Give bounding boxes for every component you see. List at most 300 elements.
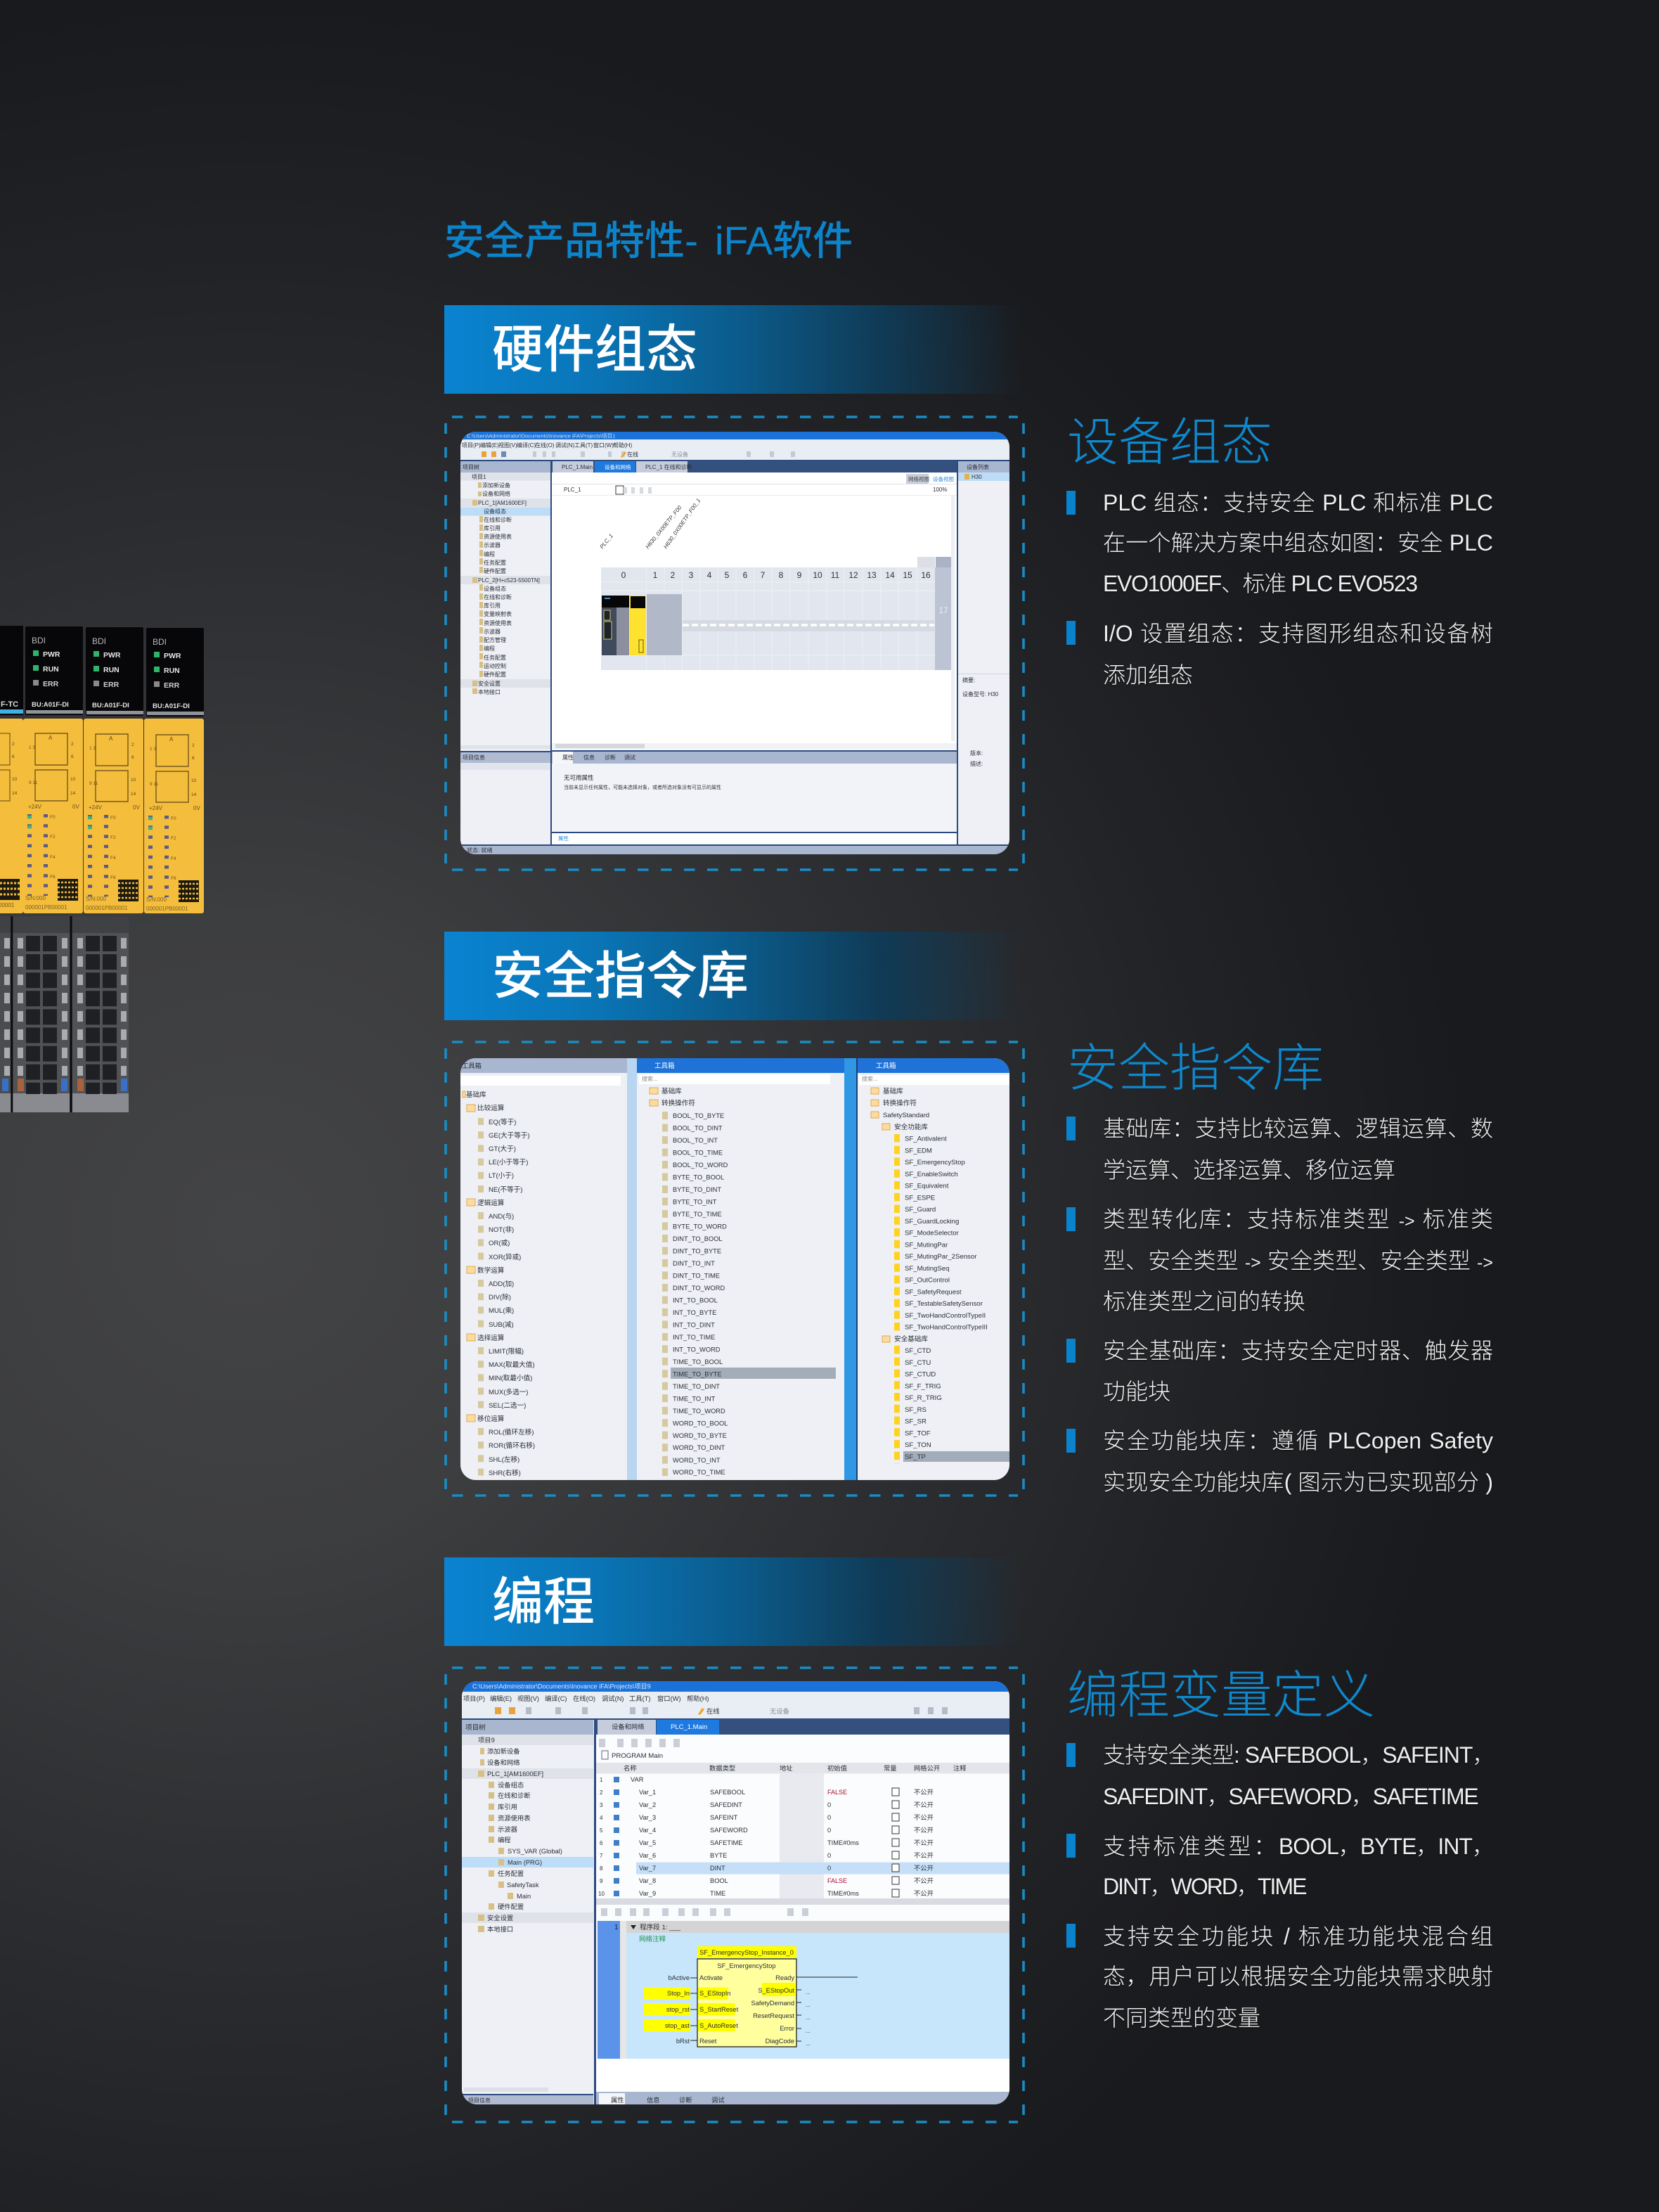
project tree panel: 编程 bbox=[484, 645, 495, 652]
variable table: PROGRAM Main bbox=[612, 1752, 663, 1760]
module 4: RUN bbox=[164, 667, 180, 675]
toolbox: conversion operators: INT_TO_WORD bbox=[673, 1346, 721, 1353]
menu and toolbar: 视图(V) bbox=[517, 1695, 539, 1702]
project tree panel: 添加新设备 bbox=[482, 482, 510, 489]
module 2: ERR bbox=[43, 680, 59, 688]
toolbox: SafetyStandard: SF_TestableSafetySensor bbox=[905, 1300, 983, 1308]
project tree panel: PLC_1[AM1600EF] bbox=[487, 1770, 543, 1777]
toolbox: conversion operators: 搜索... bbox=[642, 1075, 658, 1082]
variable table: BOOL bbox=[710, 1877, 728, 1884]
bullet list: instruction library: 型、安全类型 -⁠> 安全类型、安全类型 -⁠> bbox=[1103, 1248, 1493, 1273]
bullet list: instruction library: 基础库：支持比较运算、逻辑运算、数 bbox=[1103, 1116, 1493, 1141]
device view canvas: 11 bbox=[831, 570, 840, 580]
variable table: 数据类型 bbox=[709, 1764, 735, 1772]
project tree panel: 资源使用表 bbox=[498, 1814, 530, 1822]
module 4: ERR bbox=[164, 681, 180, 690]
function block SF_EmergencyStop: Stop_In bbox=[667, 1990, 690, 1997]
toolbox: SafetyStandard: SF_EmergencyStop bbox=[905, 1159, 965, 1166]
project tree panel: 变量映射表 bbox=[484, 610, 512, 617]
project tree panel: 硬件配置 bbox=[484, 671, 506, 678]
status bar: 状态: 就绪 bbox=[467, 847, 492, 854]
project tree panel: 任务配置 bbox=[484, 654, 506, 661]
toolbox: conversion operators: BOOL_TO_INT bbox=[673, 1137, 718, 1144]
device view canvas: 4 bbox=[707, 570, 712, 580]
heading: 编程变量定义: 编程变量定义 bbox=[1067, 1667, 1375, 1724]
toolbox: conversion operators: BOOL_TO_BYTE bbox=[673, 1112, 724, 1119]
project tree panel: 本地接口 bbox=[478, 688, 501, 695]
ladder network with function block: 程序段 1: ___ bbox=[640, 1923, 681, 1931]
toolbox: base library: EQ(等于) bbox=[489, 1118, 516, 1126]
section banner: 编程: 编程 bbox=[492, 1574, 595, 1631]
module 2: 2 bbox=[71, 742, 74, 747]
project tree panel: 运动控制 bbox=[484, 662, 506, 669]
bullet list: instruction library bbox=[1066, 1116, 1493, 1495]
toolbox: conversion operators: BYTE_TO_INT bbox=[673, 1198, 717, 1205]
variable table: 0 bbox=[827, 1827, 831, 1834]
toolbox: base library: AND(与) bbox=[489, 1213, 514, 1221]
toolbox: conversion operators: BYTE_TO_TIME bbox=[673, 1211, 722, 1218]
variable table: 不公开 bbox=[914, 1789, 934, 1796]
toolbox: SafetyStandard: SF_MutingPar bbox=[905, 1241, 948, 1249]
toolbox: SafetyStandard: SF_TwoHandControlTypeII bbox=[905, 1312, 986, 1320]
device library panel bbox=[958, 461, 1009, 767]
function block SF_EmergencyStop: S_EStopOut bbox=[758, 1987, 794, 1994]
module 3: ERR bbox=[103, 681, 120, 689]
project tree panel: 库引用 bbox=[484, 525, 501, 532]
toolbox: conversion operators: TIME_TO_DINT bbox=[673, 1383, 720, 1390]
toolbox: SafetyStandard: SF_CTUD bbox=[905, 1371, 936, 1379]
toolbox: base library: SEL(二选一) bbox=[489, 1401, 526, 1410]
function block SF_EmergencyStop: S_StartReset bbox=[699, 2006, 739, 2013]
toolbox: SafetyStandard: SF_ModeSelector bbox=[905, 1229, 960, 1237]
title: 安全产品特性- iFA软件 bbox=[444, 219, 853, 264]
toolbox: base library: OR(或) bbox=[489, 1239, 510, 1247]
function block SF_EmergencyStop: ... bbox=[806, 2014, 811, 2021]
toolbox: conversion operators: INT_TO_BOOL bbox=[673, 1297, 718, 1304]
function block SF_EmergencyStop: S_EStopIn bbox=[699, 1990, 730, 1997]
module partial left: 10 bbox=[12, 777, 18, 782]
module 2: BDI bbox=[32, 636, 46, 645]
toolbox: conversion operators: INT_TO_BYTE bbox=[673, 1309, 716, 1316]
properties panel: 属性 bbox=[558, 835, 569, 842]
bullet list: instruction library: 安全功能块库：遵循 PLCopen Safety bbox=[1103, 1428, 1493, 1453]
toolbox: SafetyStandard: SF_MutingSeq bbox=[905, 1265, 949, 1273]
toolbox: base library: NE(不等于) bbox=[489, 1185, 523, 1194]
toolbox: base library: SUB(减) bbox=[489, 1320, 514, 1329]
variable table: 不公开 bbox=[914, 1877, 934, 1884]
toolbox: conversion operators: BYTE_TO_WORD bbox=[673, 1223, 727, 1230]
module 4: 10 bbox=[191, 778, 197, 783]
toolbox: SafetyStandard: SF_ESPE bbox=[905, 1194, 935, 1202]
module 4: F4 bbox=[171, 856, 176, 861]
module 2: S/N:000 bbox=[25, 895, 46, 901]
module 4 bbox=[144, 628, 204, 913]
project tree panel: PLC_1[AM1600EF] bbox=[478, 500, 527, 506]
toolbox: base library: GE(大于等于) bbox=[489, 1131, 530, 1140]
variable table: 4 bbox=[600, 1815, 603, 1821]
module 4: 000001PB00001 bbox=[146, 906, 188, 912]
toolbox: SafetyStandard: SF_Guard bbox=[905, 1206, 936, 1214]
toolbox: conversion operators: DINT_TO_TIME bbox=[673, 1272, 720, 1279]
bullet list: device configuration bbox=[1066, 490, 1493, 688]
menu and toolbar: 帮助(H) bbox=[613, 442, 632, 449]
module 2: +24V bbox=[28, 804, 42, 810]
properties panel: 诊断 bbox=[605, 754, 616, 761]
device library panel: 设备列表 bbox=[967, 463, 989, 470]
menu and toolbar: 无设备 bbox=[671, 451, 688, 458]
toolbox: conversion operators: TIME_TO_BYTE bbox=[673, 1370, 722, 1377]
toolbox: base library bbox=[460, 1058, 627, 1480]
section banner: 编程 bbox=[444, 1557, 1021, 1646]
device view canvas: PLC_1 bbox=[599, 533, 614, 550]
project tree panel: SYS_VAR (Global) bbox=[508, 1848, 562, 1855]
toolbox: base library: MUX(多选一) bbox=[489, 1388, 529, 1396]
module 2: 14 bbox=[70, 791, 76, 796]
toolbox: SafetyStandard: 安全功能库 bbox=[894, 1123, 928, 1131]
variable table: 不公开 bbox=[914, 1814, 934, 1821]
ladder network with function block: 1 bbox=[614, 1924, 619, 1931]
toolbox: SafetyStandard: SF_Antivalent bbox=[905, 1135, 947, 1143]
toolbox: SafetyStandard: 搜索... bbox=[862, 1075, 878, 1082]
menu and toolbar: 工具(T) bbox=[629, 1695, 650, 1702]
module 2: 000001PB00001 bbox=[25, 904, 67, 911]
properties panel: 调试 bbox=[624, 754, 635, 761]
toolbox: conversion operators: DINT_TO_BYTE bbox=[673, 1247, 721, 1254]
function block SF_EmergencyStop: DiagCode bbox=[766, 2038, 794, 2045]
toolbox: conversion operators: WORD_TO_BYTE bbox=[673, 1432, 727, 1439]
toolbox: base library: MUL(乘) bbox=[489, 1306, 514, 1315]
project tree panel: 设备组态 bbox=[484, 508, 506, 515]
device view canvas: H630_0X00ETP_F00_1 bbox=[662, 497, 702, 550]
toolbox: SafetyStandard: SF_RS bbox=[905, 1406, 927, 1414]
toolbox: base library: SHL(左移) bbox=[489, 1455, 519, 1464]
bullet list: programming: 态，用户可以根据安全功能块需求映射 bbox=[1103, 1964, 1493, 1989]
function block SF_EmergencyStop: Reset bbox=[699, 2038, 717, 2045]
toolbox: SafetyStandard: SF_EDM bbox=[905, 1147, 932, 1155]
variable table: Var_7 bbox=[639, 1865, 656, 1872]
function block SF_EmergencyStop: SF_EmergencyStop bbox=[717, 1962, 776, 1969]
module 4: F6 bbox=[171, 876, 176, 881]
variable table: 0 bbox=[827, 1865, 831, 1872]
variable table: 不公开 bbox=[914, 1801, 934, 1808]
device view canvas: 网络视图 bbox=[908, 475, 929, 482]
device view canvas: 0 bbox=[621, 570, 626, 580]
menu and toolbar: 在线(O) bbox=[573, 1695, 595, 1702]
toolbox: SafetyStandard: SF_CTD bbox=[905, 1347, 931, 1355]
project tree panel: 示波器 bbox=[484, 541, 501, 548]
variable table: 0 bbox=[827, 1801, 831, 1808]
menu and toolbar: 工具(T) bbox=[574, 442, 593, 449]
project tree panel: 库引用 bbox=[498, 1803, 517, 1811]
project tree panel: Main bbox=[517, 1893, 531, 1900]
toolbox: base library: MAX(取最大值) bbox=[489, 1361, 535, 1369]
device view canvas: 5 bbox=[725, 570, 730, 580]
menu and toolbar: 项目(P) bbox=[463, 1695, 485, 1702]
module 2 bbox=[23, 626, 83, 913]
toolbox: SafetyStandard: SF_SafetyRequest bbox=[905, 1288, 962, 1296]
toolbox: SafetyStandard: SF_GuardLocking bbox=[905, 1218, 959, 1226]
toolbox: conversion operators: WORD_TO_TIME bbox=[673, 1469, 725, 1476]
module 2: 0V bbox=[72, 804, 79, 810]
device library panel: 版本: bbox=[970, 750, 983, 757]
module 2: BU:A01F-DI bbox=[32, 701, 69, 709]
device view canvas: 2 bbox=[671, 570, 676, 580]
function block SF_EmergencyStop: Activate bbox=[699, 1974, 723, 1981]
project tree panel: 项目树 bbox=[463, 463, 479, 470]
device view canvas: 13 bbox=[867, 570, 877, 580]
menu and toolbar: 调试(N) bbox=[602, 1695, 624, 1702]
module 4: PWR bbox=[164, 652, 181, 660]
device view canvas: 9 bbox=[797, 570, 802, 580]
navy dividers and tab strip: PLC_1 在线和诊断 bbox=[645, 463, 692, 470]
module 4: 2 bbox=[192, 743, 195, 748]
menu and toolbar: 窗口(W) bbox=[657, 1695, 681, 1702]
toolbox: base library: ROL(循环左移) bbox=[489, 1428, 534, 1436]
module 3: BU:A01F-DI bbox=[92, 702, 129, 709]
toolbox: SafetyStandard: 转换操作符 bbox=[883, 1099, 917, 1107]
variable table: Var_5 bbox=[639, 1839, 656, 1846]
menu and toolbar: 窗口(W) bbox=[593, 442, 614, 449]
toolbox: conversion operators: WORD_TO_INT bbox=[673, 1457, 721, 1464]
device view canvas: 14 bbox=[885, 570, 895, 580]
device view canvas: 6 bbox=[743, 570, 748, 580]
variable table: 不公开 bbox=[914, 1865, 934, 1872]
device view canvas: 15 bbox=[903, 570, 912, 580]
menu and toolbar: 编辑(E) bbox=[480, 442, 499, 449]
variable table: Var_9 bbox=[639, 1890, 656, 1897]
toolbox: conversion operators: 工具箱 bbox=[654, 1062, 675, 1070]
bullet list: instruction library: 标准类型之间的转换 bbox=[1103, 1289, 1305, 1314]
variable table: TIME bbox=[710, 1890, 725, 1897]
module 4: 6 bbox=[192, 756, 195, 761]
variable table: 0 bbox=[827, 1852, 831, 1859]
menu and toolbar: 在线 bbox=[627, 451, 638, 458]
properties panel: 信息 bbox=[583, 754, 595, 761]
project tree panel bbox=[462, 1720, 593, 2104]
project tree panel: PLC_2[H+c523-5500TN] bbox=[478, 577, 540, 584]
module partial left: 2 bbox=[12, 742, 15, 747]
function block SF_EmergencyStop: stop_ast bbox=[665, 2022, 690, 2029]
toolbox: conversion operators: DINT_TO_BOOL bbox=[673, 1235, 723, 1242]
toolbox: conversion operators: BOOL_TO_WORD bbox=[673, 1162, 728, 1169]
window title bar: C:\Users\Administrator\Documents\Inovance iFA\Projects\项目9 bbox=[472, 1683, 651, 1690]
project tree panel: 硬件配置 bbox=[484, 567, 506, 574]
project tree panel: 安全设置 bbox=[478, 680, 501, 687]
module partial left: F-TC bbox=[1, 700, 18, 709]
project tree panel: 设备组态 bbox=[498, 1781, 524, 1789]
variable table: Var_1 bbox=[639, 1789, 656, 1796]
module 3 bbox=[84, 627, 143, 913]
toolbox: base library: 基础库 bbox=[466, 1091, 486, 1099]
menu and toolbar: 调试(N) bbox=[555, 442, 574, 449]
module 4: BU:A01F-DI bbox=[153, 702, 190, 710]
module 3: 14 bbox=[131, 792, 136, 797]
menu and toolbar bbox=[462, 1692, 1009, 1718]
module 3: F0 bbox=[110, 816, 116, 821]
toolbox: base library: 工具箱 bbox=[462, 1062, 482, 1069]
device library panel: 描述: bbox=[970, 760, 983, 767]
variable table: 10 bbox=[598, 1891, 605, 1897]
section banner: 硬件组态: 硬件组态 bbox=[492, 321, 697, 378]
toolbox: base library: 选择运算 bbox=[477, 1334, 505, 1342]
screenshot: programming environment bbox=[462, 1681, 1009, 2104]
module 4: +24V bbox=[149, 805, 163, 811]
menu and toolbar: 无设备 bbox=[770, 1707, 790, 1715]
menu and toolbar: 项目(P) bbox=[462, 442, 481, 449]
module 3: RUN bbox=[103, 666, 120, 674]
toolbox: SafetyStandard: SF_CTU bbox=[905, 1359, 931, 1367]
toolbox: conversion operators: TIME_TO_WORD bbox=[673, 1408, 725, 1415]
bullet list: instruction library: 实现安全功能块库( 图示为已实现部分 ) bbox=[1103, 1470, 1493, 1495]
device view canvas: 3 bbox=[689, 570, 694, 580]
module 4: 9 11 bbox=[150, 782, 159, 787]
toolbox: base library: LIMIT(限幅) bbox=[489, 1347, 524, 1356]
menu and toolbar: 编辑(E) bbox=[490, 1695, 512, 1702]
toolbox: base library: GT(大于) bbox=[489, 1145, 516, 1153]
project tree panel: 任务配置 bbox=[498, 1870, 524, 1877]
variable table: 注释 bbox=[953, 1764, 967, 1772]
menu and toolbar: 在线(O) bbox=[535, 442, 555, 449]
variable table: 不公开 bbox=[914, 1839, 934, 1846]
toolbox: SafetyStandard: 安全基础库 bbox=[894, 1335, 928, 1343]
variable table: 网格公开 bbox=[914, 1764, 940, 1772]
variable table: DINT bbox=[710, 1865, 725, 1872]
device library panel: H30 bbox=[971, 474, 982, 480]
device library panel: 设备型号: H30 bbox=[962, 690, 999, 697]
bullet list: device configuration: 添加组态 bbox=[1103, 662, 1193, 688]
project tree panel: 项目1 bbox=[472, 474, 486, 480]
module 4: F0 bbox=[171, 816, 176, 821]
navy dividers and tab strip bbox=[460, 460, 1009, 472]
bottom tabs: 调试 bbox=[711, 2096, 725, 2104]
bullet list: programming: 支持标准类型：BOOL，BYTE，INT， bbox=[1103, 1834, 1494, 1859]
ladder network with function block: 网络注释 bbox=[639, 1935, 666, 1943]
properties panel: 无可用属性 bbox=[564, 774, 594, 781]
toolbox: conversion operators: WORD_TO_DINT bbox=[673, 1444, 725, 1451]
project tree panel: 项目信息 bbox=[463, 754, 485, 761]
toolbox: SafetyStandard: SF_Equivalent bbox=[905, 1183, 949, 1190]
function block SF_EmergencyStop bbox=[644, 1946, 858, 2047]
device view canvas: H630_0X00ETP_F00 bbox=[645, 504, 683, 550]
toolbox: SafetyStandard: SF_SR bbox=[905, 1418, 927, 1426]
toolbox: base library: DIV(除) bbox=[489, 1293, 511, 1301]
variable table: SAFEINT bbox=[710, 1814, 738, 1821]
variable table: Var_6 bbox=[639, 1852, 656, 1859]
bottom tabs: 信息 bbox=[647, 2096, 660, 2104]
toolbox: SafetyStandard: SF_TwoHandControlTypeIII bbox=[905, 1323, 988, 1332]
function block SF_EmergencyStop: ... bbox=[806, 1989, 811, 1995]
device view canvas: 1 bbox=[653, 570, 658, 580]
navy dividers and tab strip: PLC_1.Main bbox=[562, 464, 593, 470]
project tree panel: 在线和诊断 bbox=[498, 1792, 530, 1799]
section banner: 安全指令库: 安全指令库 bbox=[492, 948, 749, 1005]
divider strip bbox=[627, 1058, 637, 1480]
bullet list: programming: 支持安全类型: SAFEBOOL，SAFEINT， bbox=[1103, 1742, 1494, 1768]
menu and toolbar: 帮助(H) bbox=[687, 1695, 709, 1702]
module 3: 1 3 bbox=[89, 746, 96, 751]
toolbox: SafetyStandard: SF_EnableSwitch bbox=[905, 1171, 958, 1178]
function block SF_EmergencyStop: bActive bbox=[668, 1974, 690, 1981]
variable table: SAFETIME bbox=[710, 1839, 742, 1846]
toolbox: conversion operators: 转换操作符 bbox=[661, 1099, 695, 1107]
project tree panel: SafetyTask bbox=[507, 1882, 539, 1889]
bullet list: programming: SAFEDINT，SAFEWORD，SAFETIME bbox=[1103, 1784, 1478, 1809]
project tree panel: 资源使用表 bbox=[484, 619, 512, 626]
toolbox: conversion operators: INT_TO_DINT bbox=[673, 1321, 715, 1328]
module 3: F6 bbox=[110, 875, 116, 880]
variable table: 不公开 bbox=[914, 1852, 934, 1859]
panel: safety instruction library screenshot bbox=[444, 1041, 1025, 1497]
divider strip blue bbox=[844, 1058, 856, 1480]
toolbox: base library: SHR(右移) bbox=[489, 1469, 521, 1477]
toolbox: SafetyStandard: SF_TOF bbox=[905, 1430, 931, 1437]
bullet list: programming: DINT，WORD，TIME bbox=[1103, 1874, 1305, 1899]
tab strip: PLC_1.Main bbox=[671, 1723, 707, 1731]
bullet list: device configuration: PLC 组态：支持安全 PLC 和标准 PLC bbox=[1103, 490, 1493, 515]
toolbox: SafetyStandard bbox=[856, 1058, 1009, 1480]
variable table: 3 bbox=[600, 1802, 603, 1808]
toolbox: conversion operators bbox=[637, 1058, 844, 1480]
variable table: BYTE bbox=[710, 1852, 727, 1859]
module 2: F0 bbox=[50, 815, 56, 820]
variable table: 不公开 bbox=[914, 1890, 934, 1897]
project tree panel: 库引用 bbox=[484, 602, 501, 609]
bullet list: instruction library: 学运算、选择运算、移位运算 bbox=[1103, 1157, 1395, 1183]
properties panel: 当前未显示任何属性，可能未选择对象，或者所选对象没有可显示的属性 bbox=[564, 784, 721, 790]
toolbox: conversion operators: 基础库 bbox=[661, 1087, 682, 1095]
bullet list: instruction library: 安全基础库：支持安全定时器、触发器 bbox=[1103, 1338, 1493, 1363]
window title bar: C:\Users\Administrator\Documents\Inovance iFA\Projects\项目1 bbox=[467, 433, 615, 439]
function block SF_EmergencyStop: SafetyDemand bbox=[751, 2000, 794, 2007]
device view canvas: 17 bbox=[938, 605, 948, 615]
toolbox: SafetyStandard: 工具箱 bbox=[876, 1062, 896, 1070]
device view canvas: 16 bbox=[921, 570, 931, 580]
window title bar bbox=[460, 432, 1009, 439]
project tree panel: 设备和网络 bbox=[482, 490, 510, 497]
toolbox: SafetyStandard: SF_F_TRIG bbox=[905, 1382, 941, 1391]
toolbox: conversion operators: TIME_TO_BOOL bbox=[673, 1358, 723, 1365]
variable table: 常量 bbox=[884, 1764, 897, 1772]
bullet list: programming bbox=[1066, 1742, 1494, 2031]
device view canvas: 设备视图 bbox=[933, 475, 954, 482]
section banner: 安全指令库 bbox=[444, 932, 1021, 1020]
module 2: F6 bbox=[50, 875, 56, 880]
module 4: A bbox=[169, 736, 174, 742]
module 3: 6 bbox=[131, 755, 134, 760]
section banner: 硬件组态 bbox=[444, 305, 1021, 394]
variable table: Var_3 bbox=[639, 1814, 656, 1821]
project tree panel: 在线和诊断 bbox=[484, 593, 512, 600]
module 2: A bbox=[49, 735, 53, 741]
variable table: 0 bbox=[827, 1814, 831, 1821]
toolbox: base library: 数学运算 bbox=[477, 1266, 505, 1275]
bullet list: instruction library: 类型转化库：支持标准类型 -⁠> 标准类 bbox=[1103, 1207, 1493, 1232]
function block SF_EmergencyStop: ... bbox=[806, 2040, 811, 2047]
module 3: 0V bbox=[133, 804, 140, 811]
project tree panel: 项目9 bbox=[478, 1737, 495, 1744]
module 4: BDI bbox=[153, 637, 167, 647]
variable table: 9 bbox=[600, 1878, 603, 1884]
properties panel: 属性 bbox=[562, 754, 574, 761]
project tree panel: 示波器 bbox=[484, 628, 501, 635]
variable table: FALSE bbox=[827, 1789, 847, 1796]
function block SF_EmergencyStop: bRst bbox=[676, 2038, 690, 2045]
function block SF_EmergencyStop: stop_rst bbox=[666, 2006, 690, 2013]
toolbox: conversion operators: BYTE_TO_DINT bbox=[673, 1186, 721, 1193]
bullet list: programming: 不同类型的变量 bbox=[1103, 2005, 1260, 2031]
toolbox: conversion operators: BOOL_TO_DINT bbox=[673, 1125, 723, 1132]
module 4: S/N:000 bbox=[146, 896, 167, 903]
